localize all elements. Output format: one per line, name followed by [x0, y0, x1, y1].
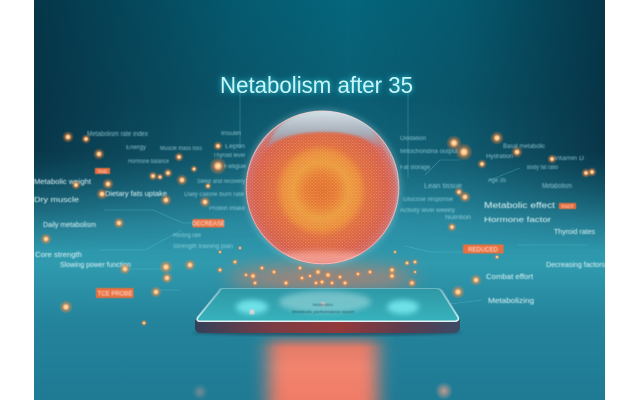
orange tags: FACT	[562, 204, 573, 209]
small background labels: Energy	[126, 145, 146, 151]
small background labels: Mitochondria output	[400, 149, 458, 155]
orange tags: DECREASE	[192, 222, 225, 228]
small background labels: Glucose response	[403, 197, 454, 203]
small background labels: Muscle mass loss	[160, 146, 202, 152]
phone reflection	[268, 333, 378, 400]
white labels right: Combat effort	[486, 272, 534, 281]
small background labels: Lean tissue	[424, 183, 462, 190]
small background labels: Activity level weekly	[400, 208, 455, 214]
small background labels: Fatigue	[224, 164, 247, 170]
small background labels: Insulin	[221, 131, 241, 137]
small background labels: Nutrition	[445, 215, 471, 221]
small background labels	[87, 131, 585, 250]
glowing data dots	[40, 131, 597, 400]
white labels left: Metabolic weight	[34, 177, 92, 186]
small background labels: Oxidation	[400, 136, 426, 142]
small background labels: Metabolism rate index	[87, 131, 148, 138]
small background labels: Hydration	[486, 154, 513, 160]
white labels right: Decreasing factors	[546, 260, 605, 269]
white labels left: Slowing power function	[60, 260, 131, 269]
orange tags: TCE PROBE	[98, 292, 132, 298]
orange tags: TAG	[98, 169, 107, 174]
white labels left: Dry muscle	[34, 195, 79, 204]
small background labels: Daily calorie burn rate	[184, 192, 245, 198]
small background labels: Hormone balance	[128, 159, 170, 165]
small background labels: Thyroid level	[213, 153, 245, 159]
small background labels: Sleep and recovery	[197, 179, 245, 185]
phone screen: Metabolic performance report	[292, 309, 355, 314]
small background labels: Fat storage	[400, 165, 431, 171]
title: Netabolism after 35	[220, 72, 413, 98]
white labels right: Metabolic effect	[484, 201, 556, 210]
rising particles	[216, 246, 418, 287]
small background labels: Leptin	[225, 144, 245, 150]
connector lines	[99, 93, 588, 304]
small background labels: Vitamin D	[554, 156, 585, 162]
glass sphere	[244, 108, 402, 266]
white labels right: Thyroid rates	[554, 227, 595, 236]
white labels left: Core strength	[35, 250, 82, 259]
orange tags: REDUCED	[468, 248, 498, 254]
small background labels: Resting rate	[173, 233, 202, 239]
small background labels: Age 35	[488, 178, 507, 184]
white labels right: Hormone factor	[484, 215, 552, 224]
small background labels: Protein intake	[209, 206, 246, 212]
title: Netabolism after 35	[220, 72, 413, 98]
phone	[192, 288, 462, 336]
white labels right: Metabolizing	[488, 296, 534, 305]
floor glow under sphere	[227, 265, 417, 291]
small background labels: Body fat ratio	[527, 165, 559, 171]
orange tags	[95, 168, 576, 298]
phone screen: Metabolism	[313, 302, 334, 307]
white labels left: Dietary fats uptake	[105, 189, 167, 198]
small background labels: Basal metabolic	[503, 143, 546, 150]
small background labels: Metabolism	[542, 183, 572, 190]
phone screen	[198, 289, 458, 320]
white labels left	[34, 177, 167, 269]
white labels right	[484, 201, 605, 305]
small background labels: Strength training plan	[173, 244, 233, 250]
white labels left: Daily metabolism	[43, 220, 96, 229]
